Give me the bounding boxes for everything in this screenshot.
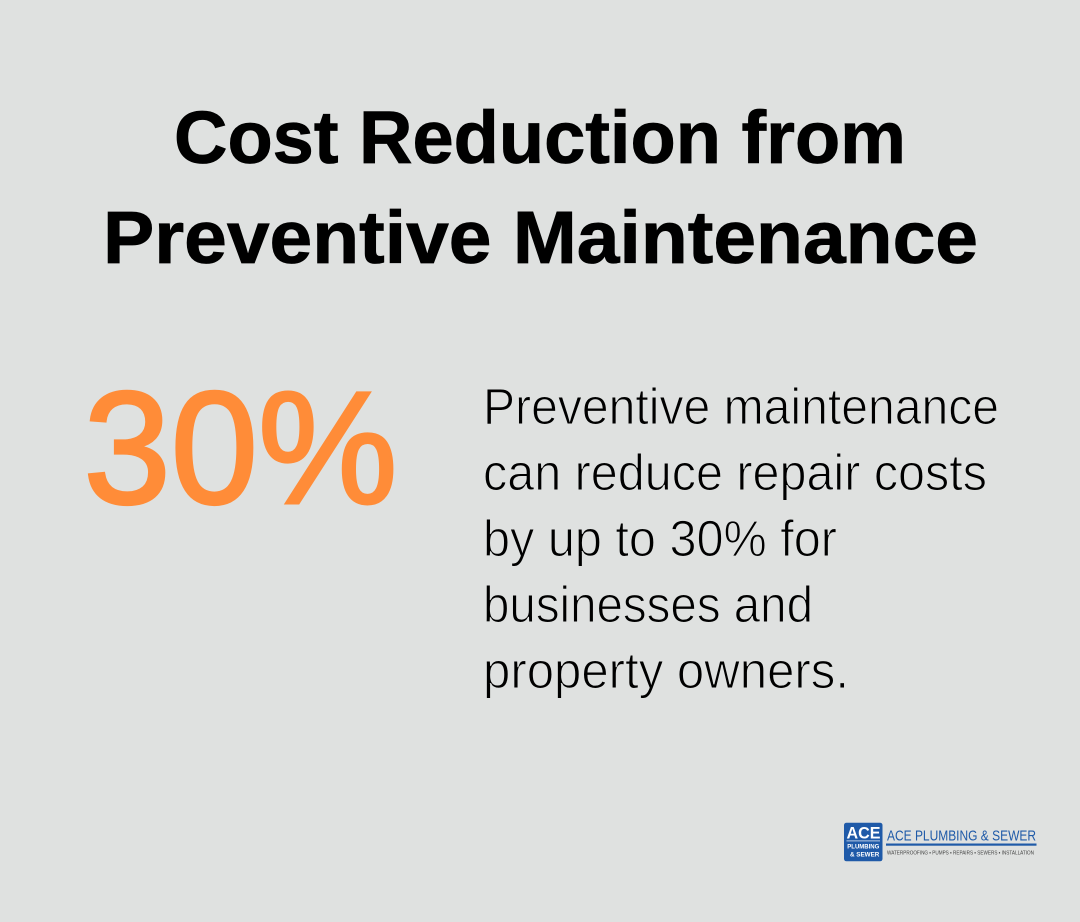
description text: Preventive maintenance bbox=[483, 378, 999, 435]
description text: can reduce repair costs bbox=[483, 444, 987, 501]
description text bbox=[483, 378, 999, 699]
logo rule bbox=[886, 844, 1036, 846]
description text: property owners. bbox=[483, 642, 849, 699]
logo badge bbox=[844, 823, 882, 861]
title: Preventive Maintenance bbox=[103, 196, 978, 279]
description text: businesses and bbox=[483, 576, 813, 633]
logo: Ace Plumbing & Sewer bbox=[844, 823, 1036, 861]
logo badge: & SEWER bbox=[850, 852, 880, 859]
title: Cost Reduction from bbox=[174, 96, 906, 179]
logo tagline: WATERPROOFING ▪ PUMPS ▪ REPAIRS ▪ SEWERS ▪ INSTALLATION bbox=[887, 850, 1034, 856]
logo wordmark: ACE PLUMBING & SEWER bbox=[887, 829, 1036, 845]
title bbox=[103, 96, 978, 279]
logo badge: ACE bbox=[846, 824, 880, 842]
description text: by up to 30% for bbox=[483, 510, 837, 567]
big statistic: 30%: 30% bbox=[84, 358, 398, 537]
logo badge: PLUMBING bbox=[847, 844, 879, 851]
